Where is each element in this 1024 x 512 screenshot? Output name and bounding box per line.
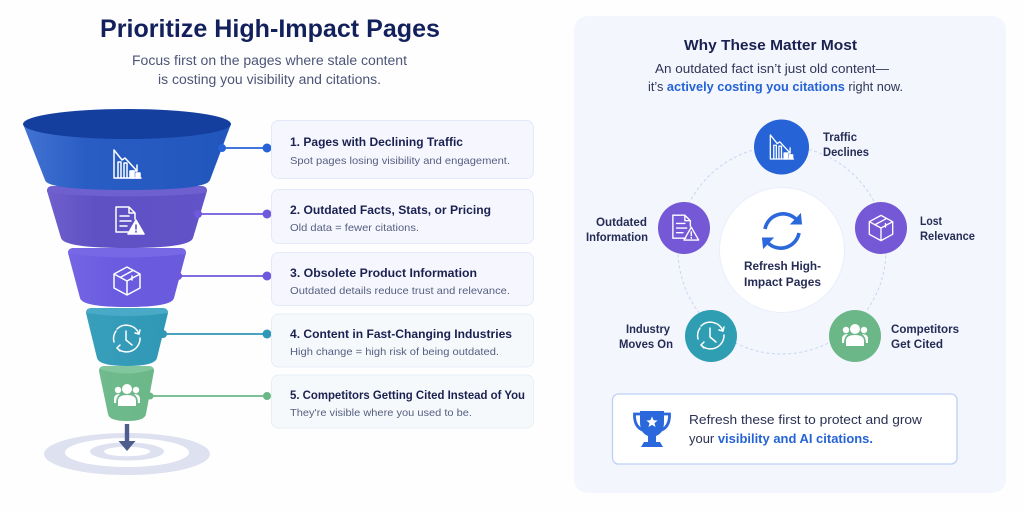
callout text: [689, 413, 923, 446]
connector 2: [194, 210, 272, 218]
panel heading: Why These Matter Most: [684, 38, 857, 54]
card 3: 3. Obsolete Product Information: [290, 266, 477, 280]
center hub: [720, 188, 844, 312]
funnel: [23, 109, 231, 475]
icon: clock: [114, 325, 140, 352]
card 5: 5. Competitors Getting Cited Instead of You: [290, 388, 525, 402]
dashed ring: [678, 146, 886, 354]
node: traffic declines: Traffic: [823, 132, 858, 144]
node: industry moves on: Moves On: [619, 339, 673, 351]
hub label: Impact Pages: [744, 277, 821, 289]
funnel segment 3: [68, 248, 186, 307]
node: lost relevance: Lost: [920, 216, 942, 228]
callout: [612, 394, 957, 464]
panel intro text: it’s actively costing you citations right now.: [648, 80, 903, 94]
hub label: Refresh High-: [744, 261, 821, 273]
icon: refresh arrows: [762, 214, 802, 248]
funnel segment 4: [86, 308, 168, 366]
icon: declining chart: [114, 150, 141, 178]
funnel segment 1: [23, 109, 231, 190]
node: lost relevance: Relevance: [920, 231, 975, 243]
card 2: [272, 190, 534, 244]
node: outdated information: Information: [586, 232, 648, 244]
connector 1: [218, 144, 272, 152]
card 2: Old data = fewer citations.: [290, 222, 419, 234]
node: industry moves on: Industry: [626, 324, 671, 336]
card 2: 2. Outdated Facts, Stats, or Pricing: [290, 203, 491, 217]
icon: box: [114, 267, 140, 295]
node: outdated information: [586, 202, 710, 254]
card 3: Outdated details reduce trust and relevance.: [290, 285, 510, 297]
node: competitors get cited: [829, 310, 959, 362]
connector 4: [159, 330, 272, 338]
panel: why these matter: [574, 16, 1006, 493]
node: traffic declines: Declines: [823, 147, 869, 159]
icon: people: [114, 384, 140, 406]
connector 3: [174, 272, 272, 280]
panel intro text: [648, 62, 903, 94]
node: industry moves on: [619, 310, 737, 362]
card 4: 4. Content in Fast-Changing Industries: [290, 327, 512, 341]
subtitle: Focus first on the pages where stale content: [132, 53, 407, 68]
connector 5: [146, 392, 271, 400]
node: traffic declines: [754, 120, 869, 174]
card 4: High change = high risk of being outdated.: [290, 346, 499, 358]
card 4: [272, 314, 534, 367]
card 1: Spot pages losing visibility and engagement.: [290, 155, 510, 167]
card 1: [272, 120, 534, 178]
card 1: 1. Pages with Declining Traffic: [290, 135, 463, 149]
icon: document warning: [116, 207, 144, 234]
node: outdated information: Outdated: [596, 217, 647, 229]
subtitle: [132, 53, 407, 87]
arrow into target: [118, 424, 136, 451]
title: Prioritize High-Impact Pages: [100, 15, 440, 43]
panel intro text: An outdated fact isn’t just old content—: [655, 62, 890, 76]
node: competitors get cited: Get Cited: [891, 339, 943, 351]
funnel segment 2: [47, 186, 207, 248]
card 5: They're visible where you used to be.: [290, 407, 472, 419]
node: competitors get cited: Competitors: [891, 324, 959, 336]
subtitle: is costing you visibility and citations.: [158, 72, 381, 87]
callout text: Refresh these first to protect and grow: [689, 413, 923, 427]
card 5: [272, 375, 534, 428]
target rings: [44, 433, 210, 475]
card 3: [272, 252, 534, 306]
funnel segment 5: [99, 366, 154, 421]
node: lost relevance: [855, 202, 975, 254]
icon: trophy: [634, 411, 670, 447]
callout text: your visibility and AI citations.: [689, 432, 873, 446]
hub label: [744, 261, 821, 289]
